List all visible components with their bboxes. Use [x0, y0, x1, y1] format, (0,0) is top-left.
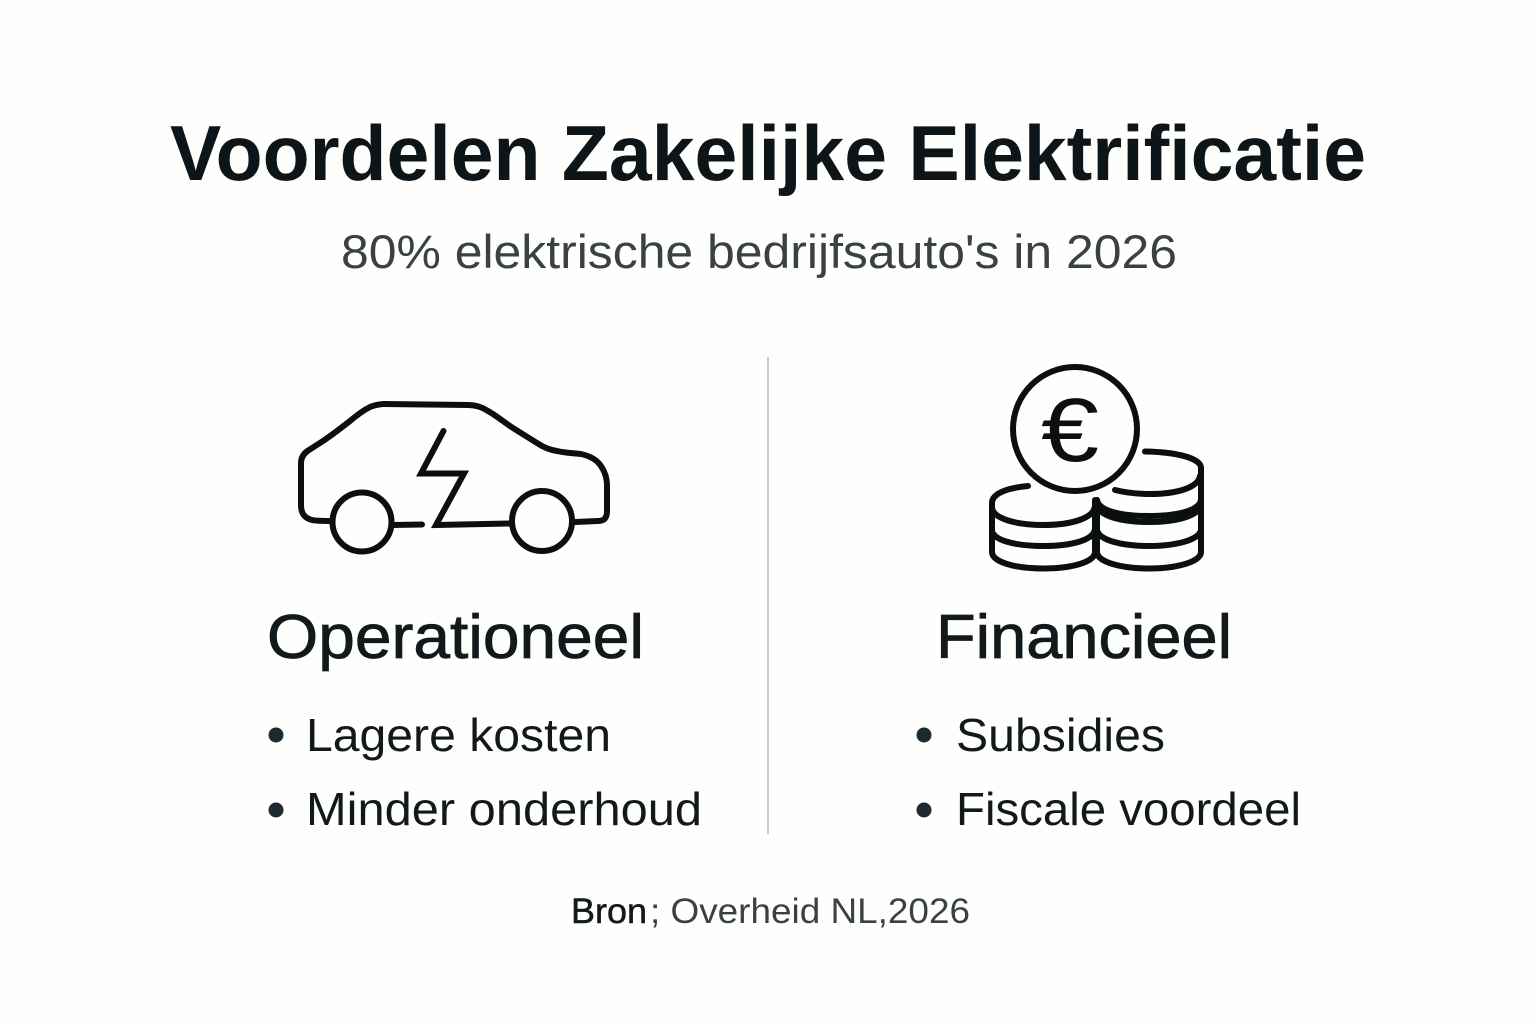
- heading: financieel: Financieel: [936, 603, 1232, 672]
- heading: operationeel: Operationeel: [267, 603, 644, 672]
- list: financiele voordelen: Subsidies: [956, 709, 1165, 761]
- icon: electric car: [301, 404, 607, 552]
- list: operationele voordelen: Minder onderhoud: [306, 783, 702, 835]
- list: operationele voordelen: Lagere kosten: [306, 709, 611, 761]
- list: financiele voordelen: [916, 709, 1301, 835]
- list: operationele voordelen: [268, 709, 702, 835]
- title: Voordelen Zakelijke Elektrificatie: [170, 109, 1366, 197]
- icon: euro coins: €: [1041, 381, 1099, 481]
- list: financiele voordelen: Fiscale voordeel: [956, 783, 1301, 835]
- panel: financieel: [916, 367, 1301, 835]
- source: ; Overheid NL,2026: [650, 892, 970, 931]
- panel: operationeel: [267, 404, 702, 835]
- subtitle: 80% elektrische bedrijfsauto's in 2026: [341, 225, 1177, 278]
- source: Bron: [571, 892, 647, 931]
- icon: euro coins: [992, 367, 1201, 568]
